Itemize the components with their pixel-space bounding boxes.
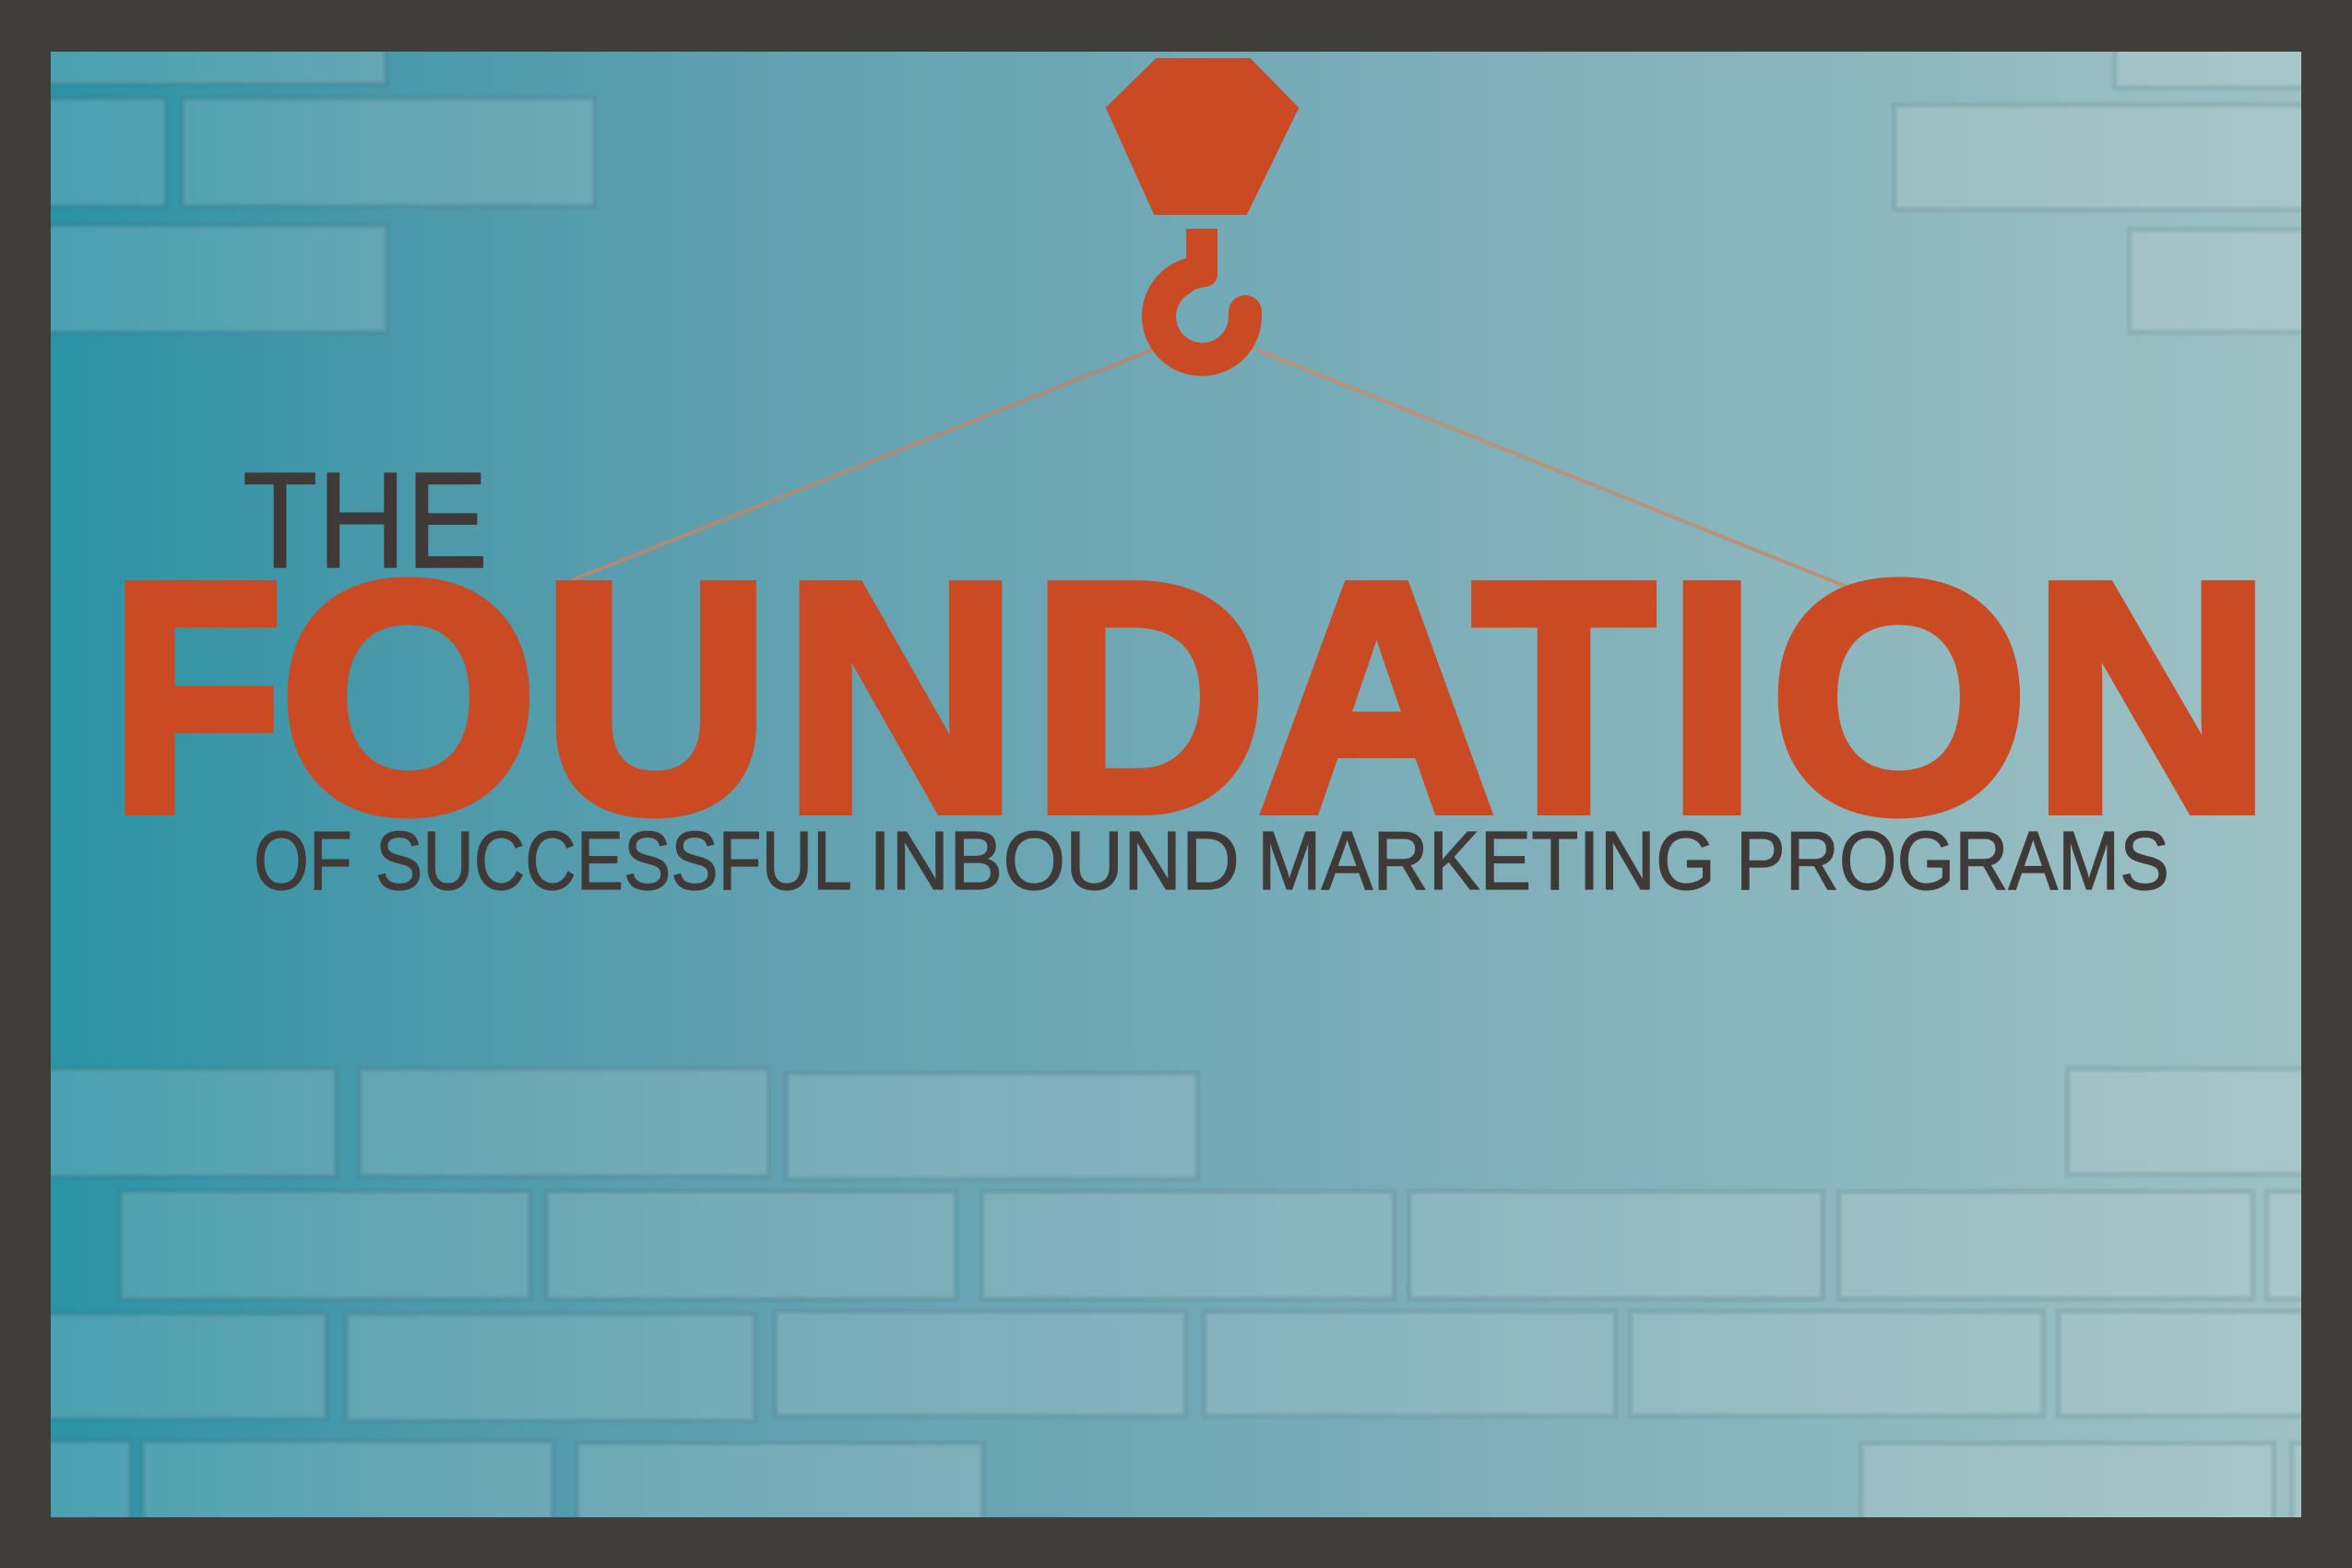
subheading: OF — [254, 815, 352, 908]
heading: THE: THE — [243, 445, 488, 597]
heading: FOUNDATION: D — [1031, 515, 1266, 879]
heading: FOUNDATION: O — [1770, 515, 2028, 879]
subheading: PROGRAMS — [1736, 815, 2169, 908]
subheading: INBOUND — [869, 815, 1240, 908]
rope: right — [1256, 350, 1847, 587]
bricks: bottom wall — [37, 1069, 2335, 1545]
heading: FOUNDATION: N — [783, 515, 1018, 879]
heading: FOUNDATION: I — [1667, 515, 1757, 879]
heading: FOUNDATION: N — [2032, 515, 2272, 879]
heading: FOUNDATION: U — [542, 515, 770, 879]
icon: crane block — [1107, 59, 1298, 214]
heading: FOUNDATION: F — [111, 515, 282, 879]
heading: FOUNDATION: T — [1473, 515, 1655, 879]
subheading: MARKETING — [1257, 815, 1716, 908]
icon: crane hook — [1142, 229, 1262, 376]
heading: FOUNDATION: A — [1259, 515, 1494, 879]
bricks: top right wall — [1892, 52, 2301, 335]
bricks: top left wall — [37, 37, 594, 332]
rope: left — [572, 350, 1153, 580]
subheading: SUCCESSFUL — [375, 815, 850, 908]
heading: FOUNDATION: O — [279, 515, 538, 879]
